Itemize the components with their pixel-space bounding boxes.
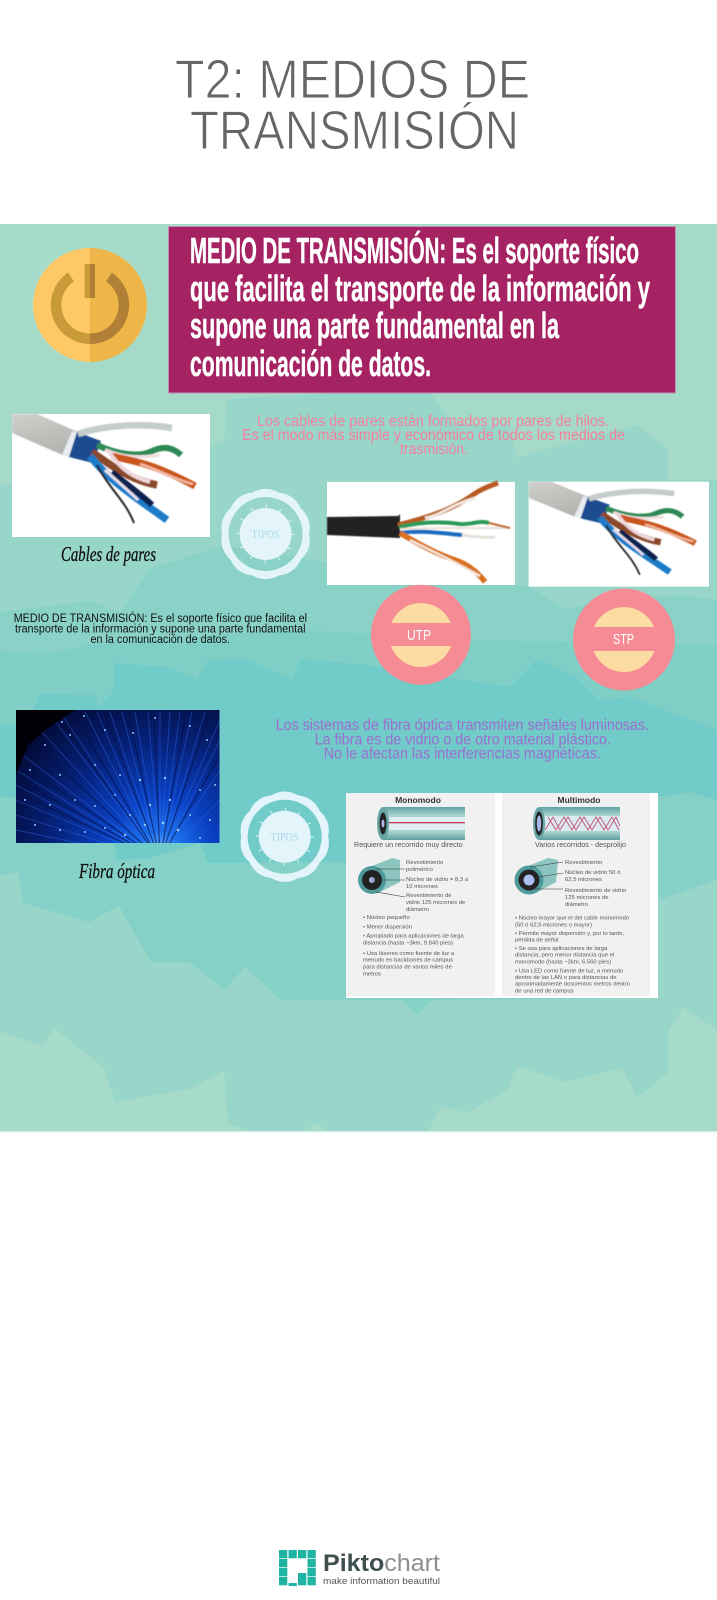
photo: utp cable: [327, 482, 515, 585]
monomodo column: Requiere un recorrido muy directo: [354, 840, 463, 849]
monomodo column: para distancias de varios miles de: [363, 965, 452, 971]
monomodo column: • Núcleo pequeño: [363, 915, 410, 921]
panel: definition box: [168, 226, 676, 393]
monomodo column: Núcleo de vidrio = 8,3 a: [406, 877, 469, 883]
monomodo column: Monomodo: [395, 795, 441, 805]
text: cables de pares description: Los cables de pares están formados por pares de hilos.: [257, 413, 609, 430]
caption: fibra optica: Fibra óptica: [78, 859, 155, 883]
text: black description: [14, 612, 307, 646]
title: TRANSMISIÓN: [190, 99, 519, 161]
multimodo column: • Se usa para aplicaciones de larga: [515, 946, 608, 952]
multimodo column: Varios recorridos - desprolijo: [535, 840, 626, 849]
multimodo column: 62,5 micrones: [565, 877, 602, 883]
badge: tipos fibra: [241, 792, 329, 882]
multimodo column: [514, 795, 631, 994]
monomodo column: Revestimiento: [406, 860, 444, 866]
caption: cables de pares: Cables de pares: [61, 542, 156, 566]
text: fibra optica description: Los sistemas de fibra óptica transmiten señales luminosas.: [276, 717, 649, 734]
definition text: comunicación de datos.: [190, 343, 431, 384]
text: fibra optica description: No le afectan las interferencias magnéticas.: [324, 746, 601, 763]
wordmark: Piktochart: [323, 1550, 440, 1577]
footer: piktochart logo: [279, 1550, 440, 1587]
definition text: [190, 229, 650, 384]
label: tipos: TIPOS: [270, 830, 298, 844]
title: T2: MEDIOS DE: [175, 48, 530, 110]
monomodo column: 10 micrones: [406, 884, 438, 890]
multimodo column: • Permite mayor dispersión y, por lo tanto,: [515, 931, 624, 937]
multimodo column: aproximadamente doscientos metros dentro: [515, 982, 631, 988]
label: tipos: TIPOS: [252, 527, 280, 541]
multimodo column: • Núcleo mayor que el del cable monomodo: [515, 916, 630, 922]
multimodo column: 125 micrones de: [565, 895, 609, 901]
monomodo column: vidrio 125 micrones de: [406, 900, 466, 906]
multimodo column: (50 ó 62,5 micrones o mayor): [515, 922, 592, 928]
photo: fibre optic strands: [16, 710, 220, 843]
badge: tipos cables: [221, 489, 310, 579]
multimodo column: monomodo (hasta ~2km, 6.560 pies): [515, 959, 611, 965]
multimodo column: Núcleo de vidrio 50 ó: [565, 870, 621, 876]
icon: stp label circle: [573, 588, 675, 690]
label: stp: STP: [613, 632, 634, 648]
monomodo column: polimérico: [406, 867, 434, 873]
multimodo column: Revestimiento: [565, 860, 603, 866]
multimodo column: de una red de campus: [515, 988, 574, 994]
monomodo column: menudo en backbones de campus: [363, 958, 453, 964]
multimodo column: Multimodo: [558, 795, 600, 805]
icon: power button: [33, 248, 147, 362]
multimodo column: dentro de las LAN o para distancias de: [515, 975, 617, 981]
diagram: monomodo and multimodo comparison: [346, 793, 658, 998]
photo: stp cable: [529, 482, 709, 587]
monomodo column: [354, 795, 469, 977]
icon: piktochart mark: [279, 1550, 316, 1586]
text: fibra optica description: La fibra es de vidrio o de otro material plástico.: [315, 731, 611, 748]
monomodo column: • Menor dispersión: [363, 925, 412, 931]
monomodo column: distancia (hasta ~3km, 9.840 pies): [363, 941, 453, 947]
tagline: make information beautiful: [323, 1576, 440, 1587]
label: utp: UTP: [407, 628, 431, 644]
monomodo column: diámetro: [406, 907, 430, 913]
text: cables de pares description: Es el modo más simple y económico de todos los medios de: [242, 427, 625, 444]
multimodo column: • Usa LED como fuente de luz, a menudo: [515, 968, 624, 974]
monomodo column: Revestimiento de: [406, 893, 452, 899]
title: [175, 48, 530, 161]
icon: utp label circle: [371, 585, 471, 685]
text: black description: MEDIO DE TRANSMISIÓN: Es el soporte físico que facilita el: [14, 612, 307, 625]
multimodo column: pérdida de señal: [515, 938, 559, 944]
background panel: [0, 224, 717, 1132]
multimodo column: Revestimiento de vidrio: [565, 888, 627, 894]
text: cables de pares description: trasmisión.: [400, 441, 468, 458]
text: cables de pares description: [242, 413, 625, 458]
text: fibra optica description: [276, 717, 649, 763]
text: black description: en la comunicación de datos.: [90, 634, 230, 646]
multimodo column: distancia, pero menor distancia que el: [515, 953, 614, 959]
photo: twisted pair cable: [12, 414, 210, 537]
text: black description: transporte de la información y supone una parte fundamental: [15, 624, 306, 636]
multimodo column: diámetro: [565, 902, 589, 908]
monomodo column: metros: [363, 971, 381, 977]
monomodo column: • Usa láseres como fuente de luz a: [363, 951, 455, 957]
monomodo column: • Apropiado para aplicaciones de larga: [363, 934, 464, 940]
